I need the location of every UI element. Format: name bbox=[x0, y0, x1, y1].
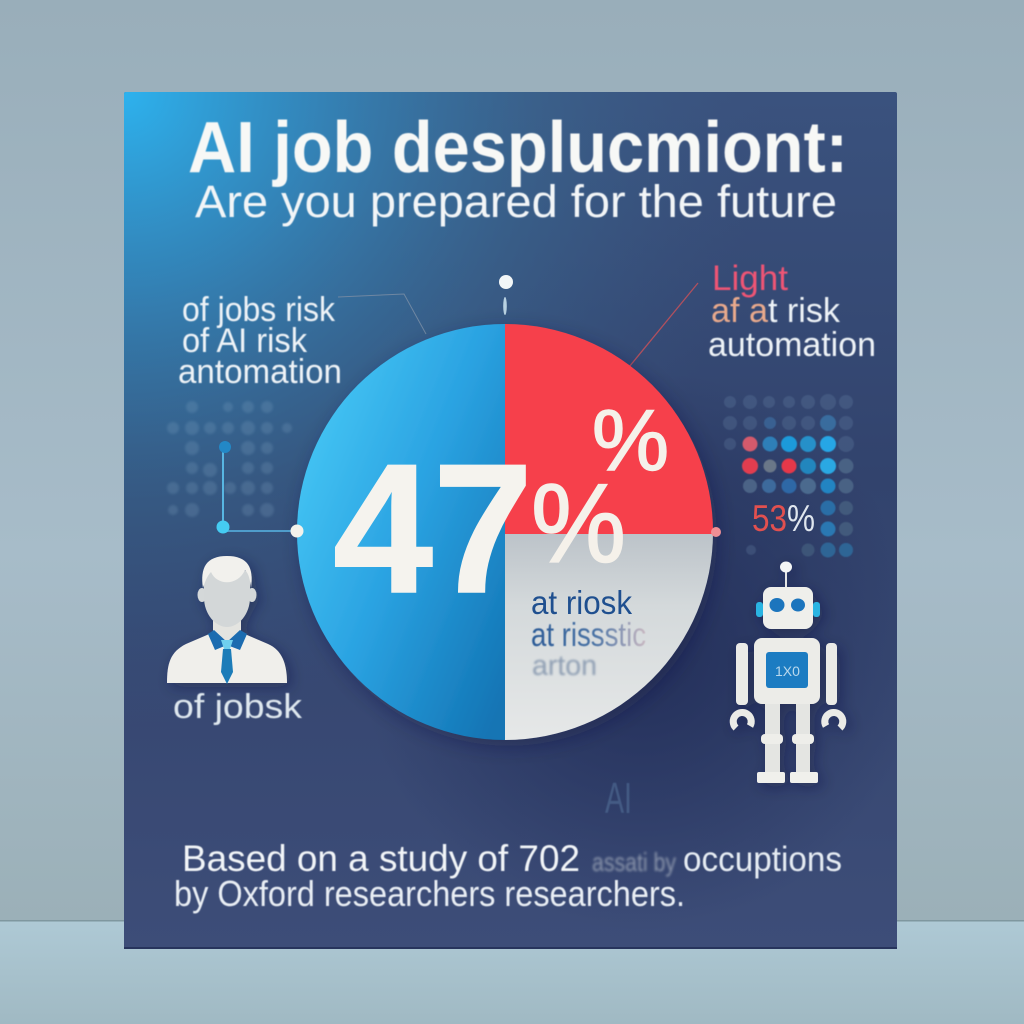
left callout text bbox=[178, 291, 342, 391]
pie label text: at rissstic bbox=[531, 616, 646, 653]
legs bbox=[765, 704, 810, 774]
antenna bbox=[780, 562, 792, 588]
tie bbox=[221, 649, 233, 684]
leader line: right callout bbox=[629, 283, 698, 367]
right dot pattern bbox=[723, 394, 854, 558]
footer text: Based on a study of 702 bbox=[182, 838, 580, 879]
right callout text: af at risk bbox=[711, 292, 841, 330]
upper percent sign: % bbox=[592, 393, 669, 489]
person caption: of jobsk bbox=[173, 688, 303, 726]
right callout text: Light bbox=[712, 259, 788, 298]
head bbox=[763, 587, 813, 629]
pie label text: arton bbox=[532, 650, 597, 682]
top marker bbox=[499, 275, 513, 315]
footer text: by Oxford researchers researchers. bbox=[174, 873, 685, 914]
icon: person bbox=[167, 556, 287, 684]
chest screen bbox=[766, 652, 808, 688]
ears bbox=[198, 588, 206, 602]
footer text bbox=[174, 838, 842, 914]
leader line: left callout bbox=[338, 294, 426, 334]
pie slice: red bbox=[505, 324, 713, 534]
panel: poster board bbox=[124, 92, 897, 949]
left callout text: of jobs risk bbox=[182, 291, 336, 329]
title: AI job desplucmiont: bbox=[188, 108, 848, 188]
torso bbox=[754, 638, 820, 704]
lower percent sign: % bbox=[531, 461, 626, 586]
left callout text: of AI risk bbox=[182, 322, 308, 360]
pie slice: blue 47% bbox=[297, 324, 505, 740]
53% label: 53% bbox=[752, 498, 815, 539]
neck bbox=[213, 612, 241, 642]
pie label text bbox=[531, 584, 646, 682]
hands bbox=[733, 712, 843, 728]
pie label text: at riosk bbox=[531, 584, 632, 621]
eyes bbox=[770, 598, 805, 612]
hair bbox=[202, 556, 252, 588]
face bbox=[204, 568, 250, 627]
left callout text: antomation bbox=[178, 353, 342, 391]
big number 47: 47 bbox=[333, 425, 533, 631]
faint AI mark: AI bbox=[605, 774, 632, 823]
knees bbox=[761, 734, 814, 744]
chest screen: 1X0 bbox=[775, 663, 800, 679]
icon: robot bbox=[733, 562, 843, 783]
shoulders bbox=[167, 632, 287, 683]
connector: person to pie bbox=[216, 441, 304, 538]
footer text: assati by bbox=[592, 847, 676, 877]
right callout text: automation bbox=[708, 326, 876, 364]
ears bbox=[756, 602, 820, 617]
arms bbox=[736, 643, 837, 705]
pie chart bbox=[297, 324, 713, 740]
marker dot on pie edge bbox=[711, 527, 721, 537]
footer text: occuptions bbox=[683, 840, 842, 879]
subtitle: Are you prepared for the future bbox=[195, 176, 837, 227]
collar bbox=[208, 630, 247, 650]
floor bbox=[0, 920, 1024, 1024]
pie slice: gray bbox=[505, 534, 713, 740]
right callout text bbox=[708, 259, 876, 364]
feet bbox=[757, 772, 818, 783]
left dot pattern bbox=[167, 401, 292, 517]
tie knot bbox=[221, 640, 233, 649]
